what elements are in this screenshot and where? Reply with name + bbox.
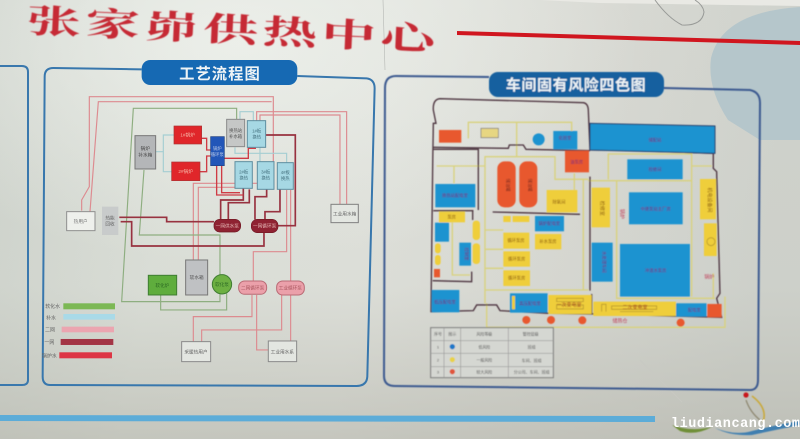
panel frame bbox=[384, 76, 760, 390]
zone labels: 水处理车间 bbox=[601, 251, 608, 273]
legend: 补水 bbox=[46, 315, 56, 322]
risk legend table: 较大风险 bbox=[476, 368, 492, 374]
risk legend table: 图示 bbox=[448, 331, 456, 337]
box: boiler circulation pump bbox=[211, 137, 224, 166]
box: plate exchanger 2: 2#板 bbox=[239, 168, 249, 175]
zone labels: 除氧间 bbox=[552, 198, 565, 205]
box: boiler 1: 1#锅炉 bbox=[180, 132, 195, 139]
zone labels: 补水泵房 bbox=[539, 238, 557, 245]
box: plate exchanger 1 bbox=[247, 121, 266, 147]
zone labels: 控制室 bbox=[463, 247, 470, 261]
bottom blue bar bbox=[0, 415, 655, 422]
box: boiler softener bbox=[135, 136, 156, 169]
legend: 软化水 bbox=[45, 303, 60, 310]
zone labels: 油泵房 bbox=[570, 158, 583, 165]
zone labels: 机电设备间 bbox=[706, 188, 713, 212]
risk legend table: 风险等级 bbox=[476, 331, 492, 337]
pump: secondary 1 bbox=[239, 281, 267, 294]
zone labels: 锅炉配电室 bbox=[539, 220, 561, 227]
pump: secondary 2: 工业循环泵 bbox=[279, 285, 302, 292]
zone labels: 换热站配电室 bbox=[442, 192, 469, 199]
heading pill: process flow bbox=[142, 60, 297, 85]
box: heat exchange station: 热能 bbox=[105, 214, 115, 221]
box: plate exchanger 2: 换热 bbox=[239, 174, 249, 181]
clipped neighbouring panel bbox=[0, 66, 28, 385]
box: boiler softener: 锅炉 bbox=[141, 145, 150, 152]
heading pill: risk map bbox=[489, 72, 664, 97]
building walls bbox=[431, 99, 722, 317]
zone labels: 冲渣水泵房 bbox=[645, 267, 666, 274]
box: plate exchanger 3 bbox=[257, 162, 274, 189]
box: softener tank: 换热站 bbox=[229, 127, 243, 134]
box: boiler 2: 2#锅炉 bbox=[178, 168, 193, 175]
pipes: primary network (dark red) bbox=[119, 135, 295, 246]
red title rule bbox=[457, 31, 800, 45]
zone labels: 泵房 bbox=[447, 213, 456, 220]
legend: 一网 bbox=[44, 340, 54, 346]
pipes: secondary network (pink) bbox=[82, 97, 347, 350]
zone labels: 锅炉 bbox=[619, 209, 626, 219]
box: plate exchanger 3: 3#板 bbox=[261, 168, 271, 175]
box: industrial water: 工业用水系 bbox=[271, 348, 294, 355]
box: plate exchanger 3: 换热 bbox=[261, 174, 271, 181]
box: boiler softener: 补水箱 bbox=[138, 152, 153, 159]
panel: four-colour risk map bbox=[384, 72, 760, 390]
box: plate exchanger 1: 换热 bbox=[252, 134, 262, 141]
risk legend table: 2 bbox=[437, 357, 440, 362]
box: plate exchanger 4: 4#板 bbox=[281, 169, 291, 176]
legend bbox=[42, 303, 115, 359]
zone labels: 一次变电室 bbox=[557, 302, 581, 309]
zone labels: 循环泵房 bbox=[508, 275, 525, 282]
pump: primary supply bbox=[214, 219, 241, 232]
box: industrial water bbox=[268, 341, 297, 362]
pipes: soft water (light blue) bbox=[156, 112, 287, 172]
box: boiler circulation pump: 循环泵 bbox=[211, 151, 224, 158]
floor plan bbox=[431, 99, 725, 327]
legend: 二网 bbox=[45, 328, 55, 334]
zone labels: 储配站 bbox=[648, 136, 662, 143]
risk legend table bbox=[431, 328, 553, 378]
zone labels: 中继泵站主厂房 bbox=[640, 205, 671, 212]
zone labels: 检修间 bbox=[648, 166, 661, 173]
zone labels: 化验室 bbox=[558, 134, 572, 141]
risk legend table: 低风险 bbox=[478, 343, 490, 349]
box: soft water tank bbox=[186, 260, 208, 295]
blue low-risk zones bbox=[432, 123, 715, 317]
zone labels: 配电室 bbox=[688, 307, 701, 314]
orange high-risk zones bbox=[434, 130, 722, 327]
panel: process flow diagram bbox=[42, 60, 375, 386]
zone labels: 储热仓 bbox=[613, 317, 627, 324]
watermark: liudiancang.com bbox=[671, 417, 800, 432]
risk legend table: 班组 bbox=[528, 343, 536, 349]
box: boiler circulation pump: 锅炉 bbox=[213, 145, 222, 152]
box: softening unit bbox=[148, 275, 177, 295]
pump: softened water: 软化泵 bbox=[215, 281, 229, 288]
box: softener tank bbox=[227, 119, 245, 147]
zone labels: 储油罐 bbox=[505, 178, 512, 192]
box: domestic water: 采暖热用户 bbox=[184, 348, 208, 355]
zone labels: 检修室 bbox=[599, 201, 606, 216]
box: soft water tank: 软水箱 bbox=[190, 274, 204, 281]
box: plate exchanger 1: 1#板 bbox=[252, 128, 262, 135]
box: boiler 1 bbox=[174, 126, 202, 144]
box: plate exchanger 2 bbox=[235, 162, 252, 188]
box: industrial heat station bbox=[331, 204, 358, 223]
zone labels: 循环泵房 bbox=[508, 256, 525, 263]
pump: secondary 2 bbox=[277, 281, 304, 295]
risk legend table: 1 bbox=[437, 344, 440, 349]
zone labels: 锅炉 bbox=[704, 273, 714, 280]
risk legend table: 车间、班组 bbox=[522, 357, 542, 363]
zone labels: 低压配电室 bbox=[434, 298, 456, 305]
pipes: softened water (green) bbox=[122, 108, 237, 310]
box: plate exchanger 4: 换热 bbox=[281, 175, 290, 182]
panel frame bbox=[43, 68, 375, 386]
zone labels: 循环泵房 bbox=[507, 237, 525, 244]
pump: primary circulation bbox=[251, 219, 278, 233]
box: heat exchange station bbox=[102, 207, 118, 235]
box: heat users bbox=[67, 212, 95, 231]
zone labels: 高压配电室 bbox=[519, 300, 541, 307]
pipes: boiler water (red) bbox=[200, 138, 256, 195]
risk legend table: 分公司、车间、班组 bbox=[514, 368, 550, 374]
box: domestic water bbox=[182, 342, 211, 362]
risk legend table: 序号 bbox=[434, 331, 442, 337]
risk legend table: 一般风险 bbox=[476, 356, 492, 362]
pump: secondary 1: 二网循环泵 bbox=[241, 284, 265, 291]
yellow medium-risk zones bbox=[435, 128, 717, 316]
risk legend table: 3 bbox=[437, 369, 440, 374]
box: softener tank: 补水箱 bbox=[229, 133, 243, 140]
box: softening unit: 软化炉 bbox=[155, 282, 170, 289]
box: boiler 2 bbox=[172, 162, 200, 181]
zone labels bbox=[434, 134, 714, 324]
yellow access routes bbox=[437, 122, 725, 327]
box: heat exchange station: 回收 bbox=[105, 220, 115, 227]
pump: primary supply: 一网供水泵 bbox=[216, 223, 239, 230]
box: plate exchanger 4 bbox=[277, 163, 293, 189]
icon: corner logo bbox=[672, 392, 800, 435]
box: industrial heat station: 工业用水箱 bbox=[333, 210, 357, 217]
equipment outlines bbox=[557, 238, 715, 312]
heading pill: risk map: 车间固有风险四色图 bbox=[506, 76, 646, 94]
zone labels: 二次变电室 bbox=[623, 304, 647, 311]
pump: softened water bbox=[212, 275, 232, 294]
zone labels: 储油罐 bbox=[526, 178, 533, 192]
risk legend table: 管控层级 bbox=[523, 331, 539, 337]
pump: primary circulation: 一网循环泵 bbox=[253, 223, 277, 230]
box: heat users: 热用户 bbox=[74, 218, 88, 225]
heading pill: process flow: 工艺流程图 bbox=[179, 65, 261, 83]
legend: 锅炉水 bbox=[42, 352, 57, 359]
